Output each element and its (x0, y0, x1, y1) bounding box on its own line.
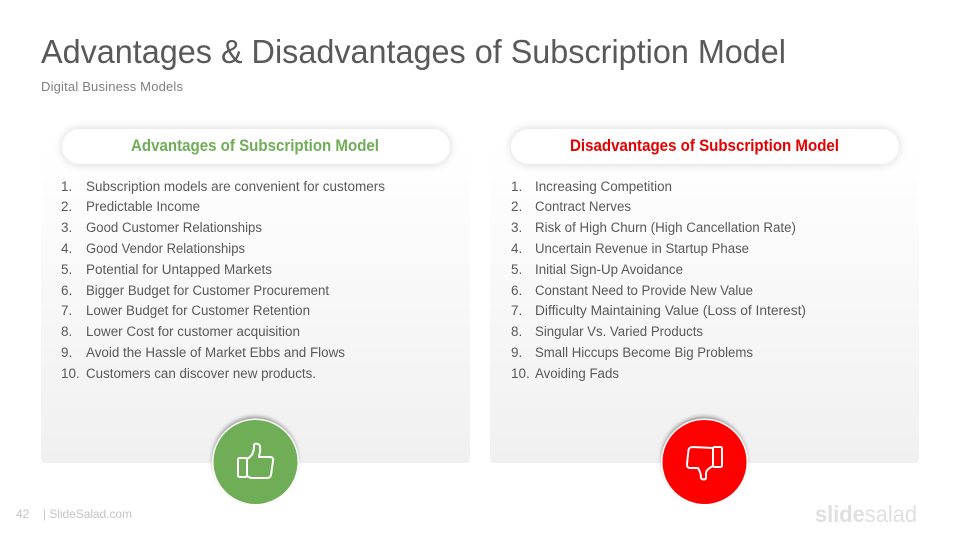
list: advantages: Good Customer Relationships (86, 220, 262, 235)
list: advantages: 8. (61, 324, 72, 339)
list: advantages: Good Vendor Relationships (86, 241, 245, 256)
icon: thumbs up (212, 417, 299, 506)
list: disadvantages: 10. (511, 366, 530, 381)
list: advantages: 2. (61, 199, 72, 214)
heading pill: disadvantages: Disadvantages of Subscription Model (570, 136, 839, 155)
list: disadvantages: 2. (511, 199, 522, 214)
list: advantages: Lower Cost for customer acquisition (86, 324, 300, 339)
list: advantages: 5. (61, 262, 72, 277)
list: advantages: 10. (61, 366, 80, 381)
list: advantages: 4. (61, 241, 72, 256)
list: disadvantages: Increasing Competition (535, 179, 672, 194)
list: disadvantages: Uncertain Revenue in Startup Phase (535, 241, 749, 256)
logo: slidesalad: slidesalad (815, 501, 917, 527)
panel background (41, 146, 470, 463)
list: disadvantages: 8. (511, 324, 522, 339)
heading pill: disadvantages (511, 129, 899, 164)
list: advantages: Potential for Untapped Markets (86, 262, 272, 277)
subtitle: Digital Business Models (41, 79, 184, 94)
list: disadvantages: Contract Nerves (535, 199, 631, 214)
list: disadvantages: 3. (511, 220, 522, 235)
list: disadvantages: 9. (511, 345, 522, 360)
panel background (490, 146, 919, 463)
list: disadvantages: 7. (511, 303, 522, 318)
list: disadvantages (511, 179, 806, 381)
list: disadvantages: Singular Vs. Varied Products (535, 324, 703, 339)
list: advantages: Lower Budget for Customer Retention (86, 303, 310, 318)
list: advantages: 7. (61, 303, 72, 318)
list: advantages: Predictable Income (86, 199, 200, 214)
list: disadvantages: Constant Need to Provide New Value (535, 283, 753, 298)
list: advantages: Avoid the Hassle of Market Ebbs and Flows (86, 345, 345, 360)
list: disadvantages: Risk of High Churn (High Cancellation Rate) (535, 220, 796, 235)
list: advantages: 9. (61, 345, 72, 360)
title: Advantages & Disadvantages of Subscription Model (41, 33, 786, 70)
list: disadvantages: 4. (511, 241, 522, 256)
list: advantages (61, 179, 385, 381)
panel: disadvantages (490, 129, 919, 506)
list: disadvantages: Avoiding Fads (535, 366, 619, 381)
heading pill: advantages: Advantages of Subscription Model (131, 136, 379, 155)
list: advantages: Subscription models are convenient for customers (86, 179, 385, 194)
icon: thumbs down (661, 417, 748, 506)
list: disadvantages: Initial Sign-Up Avoidance (535, 262, 683, 277)
page number: 42 (16, 507, 30, 521)
list: advantages: 1. (61, 179, 72, 194)
footer source: | SlideSalad.com (43, 507, 132, 521)
list: disadvantages: Small Hiccups Become Big Problems (535, 345, 753, 360)
list: advantages: 6. (61, 283, 72, 298)
panel: advantages (41, 129, 470, 506)
list: advantages: Customers can discover new products. (86, 366, 316, 381)
list: disadvantages: Difficulty Maintaining Value (Loss of Interest) (535, 303, 806, 318)
list: advantages: 3. (61, 220, 72, 235)
heading pill: advantages (62, 129, 450, 164)
list: disadvantages: 5. (511, 262, 522, 277)
list: disadvantages: 1. (511, 179, 522, 194)
list: disadvantages: 6. (511, 283, 522, 298)
list: advantages: Bigger Budget for Customer Procurement (86, 283, 329, 298)
